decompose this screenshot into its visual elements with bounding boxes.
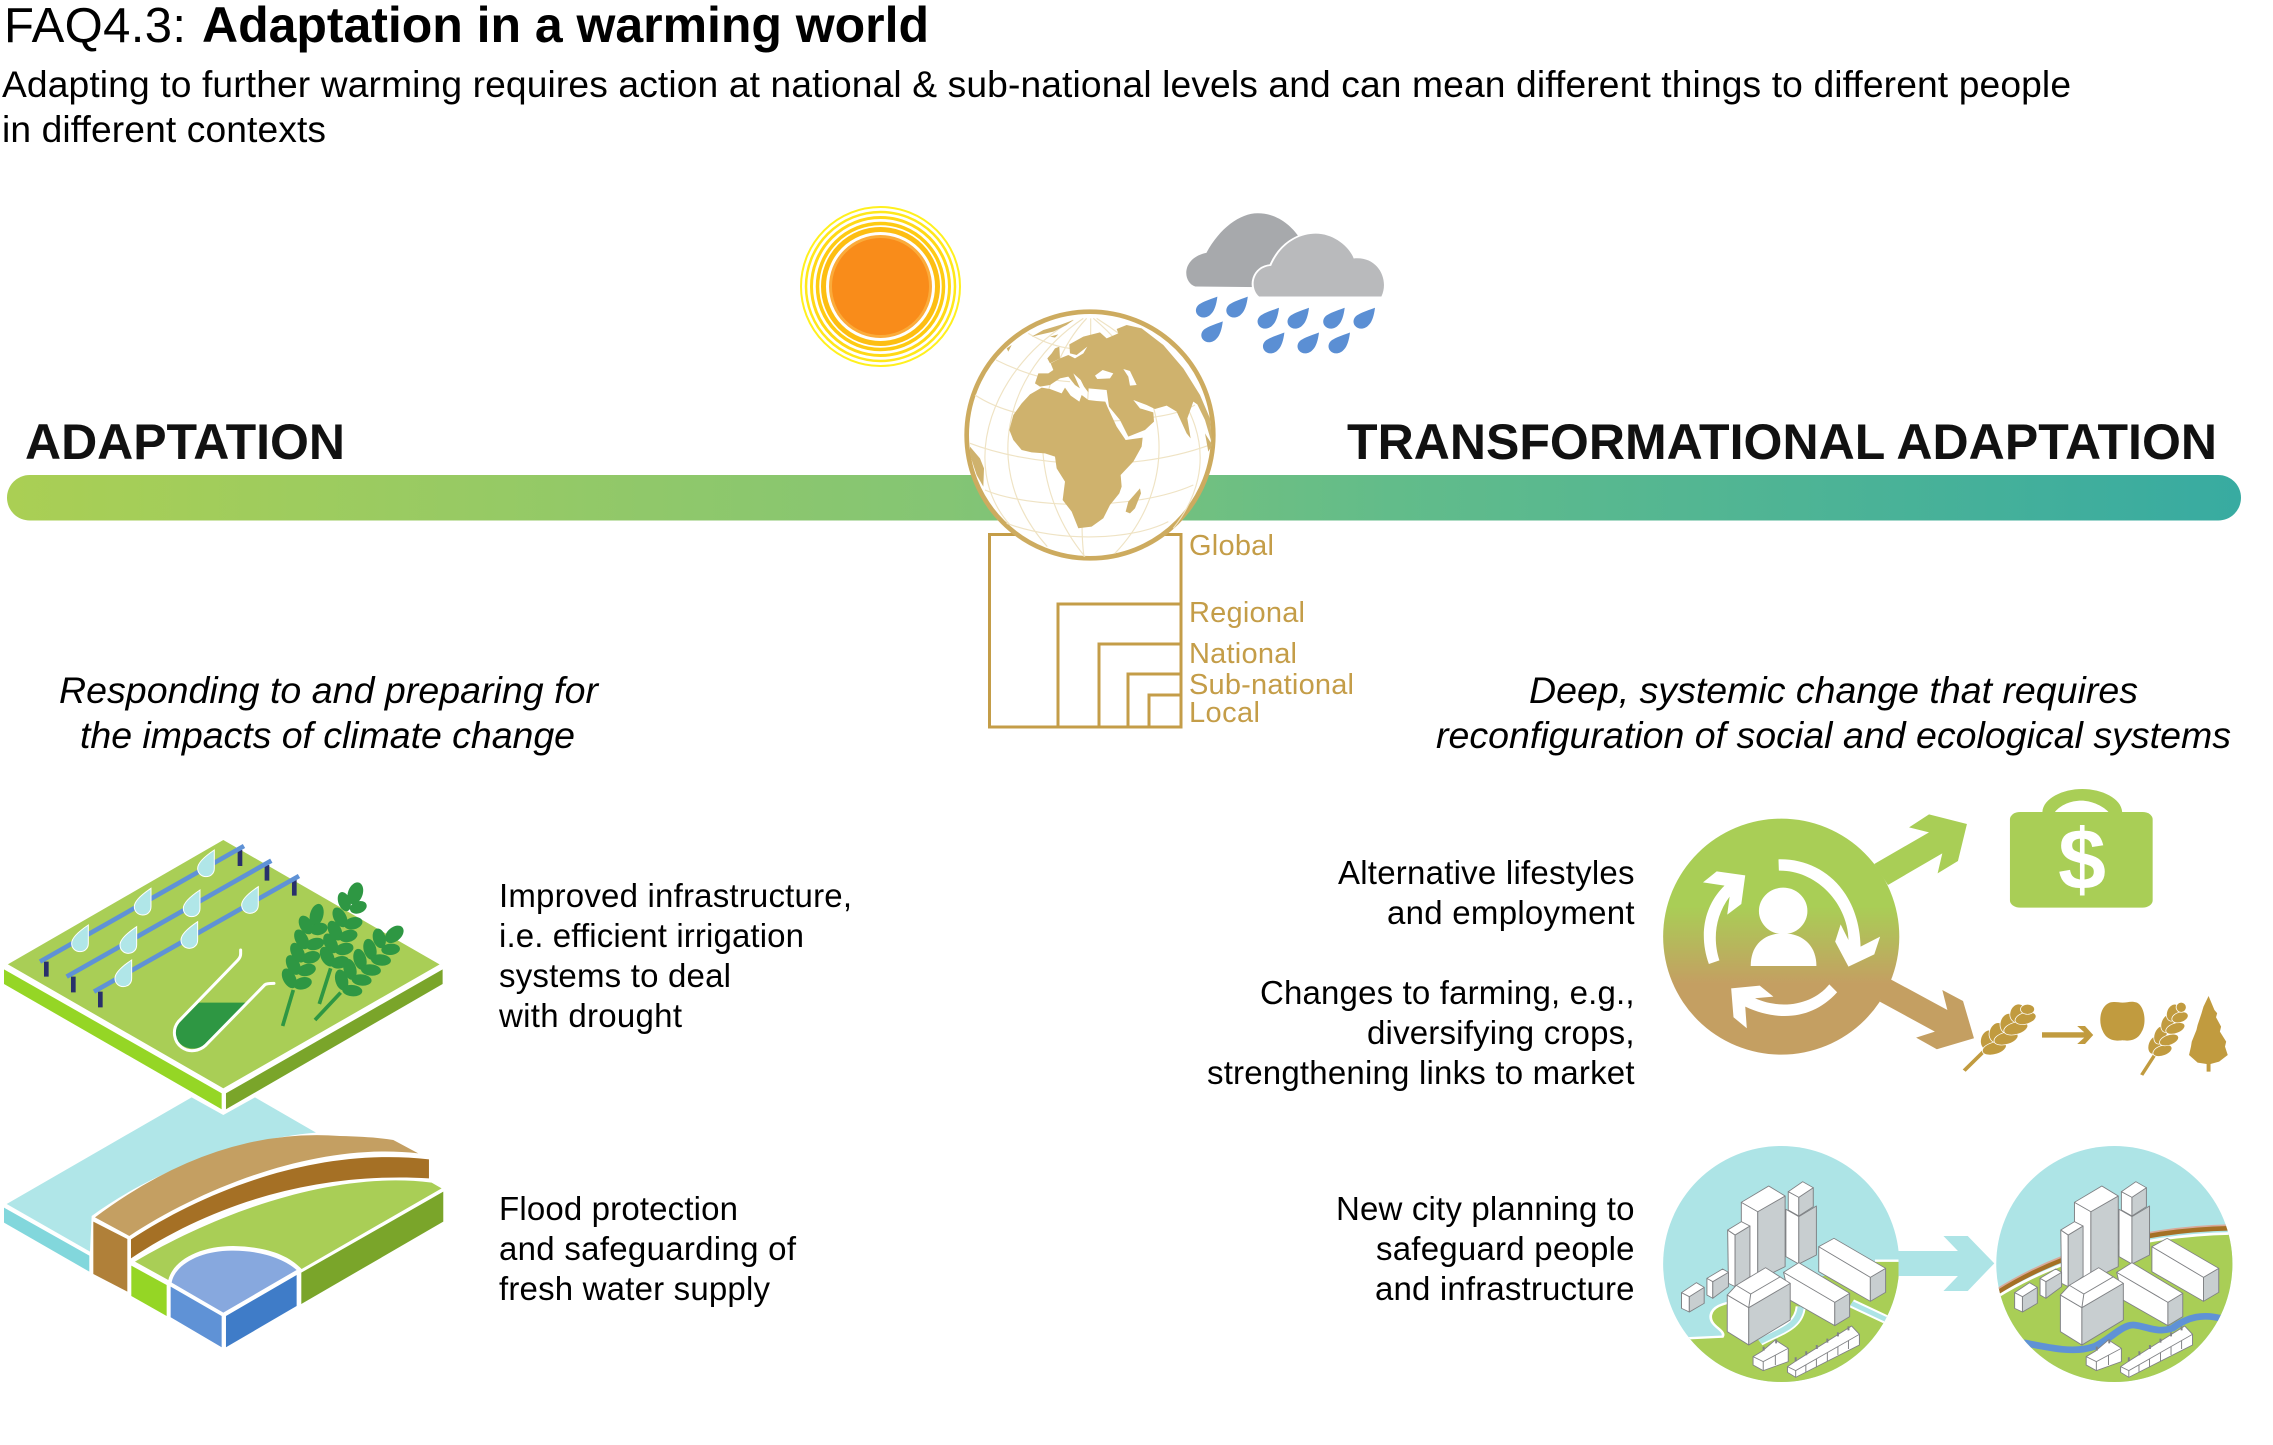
text: city planning: safeguard people xyxy=(1376,1230,1634,1267)
wheat xyxy=(279,880,407,1026)
text: farming: diversifying crops, xyxy=(1367,1014,1634,1051)
land: Africa xyxy=(1009,388,1143,528)
icon: crop diversification xyxy=(1964,996,2228,1075)
illustration: city before and after xyxy=(1663,1146,2232,1382)
text: farming xyxy=(1207,974,1634,1091)
icon: money bag: $ xyxy=(2058,812,2106,908)
scale labels: National xyxy=(1189,638,1297,670)
text: adaptation definition: the impacts of climate change xyxy=(80,714,575,756)
text: irrigation xyxy=(498,877,852,1034)
text: irrigation: systems to deal xyxy=(499,957,731,994)
land: Eurasia xyxy=(1035,325,1212,445)
arrow: before to after xyxy=(1899,1236,1994,1291)
title: FAQ4.3: xyxy=(4,0,186,53)
city after xyxy=(1996,1146,2232,1382)
text: city planning: and infrastructure xyxy=(1375,1270,1634,1307)
icon: person with cycle arrows xyxy=(1663,814,1974,1055)
subtitle: in different contexts xyxy=(2,108,326,150)
scale labels xyxy=(1189,530,1354,729)
scale labels: Sub-national xyxy=(1189,669,1354,701)
text: adaptation definition: Responding to and preparing for xyxy=(59,669,600,711)
irrigation pipes xyxy=(40,846,299,1007)
text: farming: strengthening links to market xyxy=(1207,1054,1634,1091)
text: flood protection xyxy=(499,1190,797,1307)
text: irrigation: i.e. efficient irrigation xyxy=(499,917,804,954)
text: irrigation: with drought xyxy=(498,997,682,1034)
text: transformational definition: reconfiguration of social and ecological systems xyxy=(1436,714,2231,756)
text: transformational definition: Deep, systemic change that requires xyxy=(1529,669,2138,711)
subtitle xyxy=(2,63,2071,150)
text: flood protection: Flood protection xyxy=(499,1190,738,1227)
city before xyxy=(1663,1146,1899,1382)
text: lifestyles: and employment xyxy=(1387,894,1634,931)
gradient bar xyxy=(7,475,2241,520)
illustration: flood protection xyxy=(4,1097,443,1347)
text: adaptation definition xyxy=(59,669,600,756)
text: transformational definition xyxy=(1436,669,2231,756)
scale labels: Global xyxy=(1189,530,1274,562)
nested scale boxes xyxy=(990,534,1181,727)
text: farming: Changes to farming, e.g., xyxy=(1260,974,1634,1011)
text: lifestyles: Alternative lifestyles xyxy=(1338,854,1634,891)
heading: adaptation: ADAPTATION xyxy=(25,414,345,470)
text: flood protection: and safeguarding of xyxy=(499,1230,797,1267)
icon: sun xyxy=(801,207,960,366)
subtitle: Adapting to further warming requires action at national & sub-national levels and can mean different things to different people xyxy=(2,63,2071,105)
icon: money bag xyxy=(2010,789,2153,908)
scale labels: Local xyxy=(1189,697,1260,729)
text: lifestyles xyxy=(1338,854,1634,931)
text: irrigation: Improved infrastructure, xyxy=(499,877,852,914)
heading: transformational adaptation: TRANSFORMATIONAL ADAPTATION xyxy=(1347,414,2217,470)
illustration: irrigation field xyxy=(4,840,443,1109)
scale labels: Regional xyxy=(1189,597,1305,629)
icon: globe xyxy=(967,312,1213,558)
icon: rain clouds xyxy=(1186,213,1384,353)
text: city planning: New city planning to xyxy=(1336,1190,1634,1227)
text: city planning xyxy=(1336,1190,1634,1307)
test tube xyxy=(174,950,274,1051)
text: flood protection: fresh water supply xyxy=(499,1270,770,1307)
